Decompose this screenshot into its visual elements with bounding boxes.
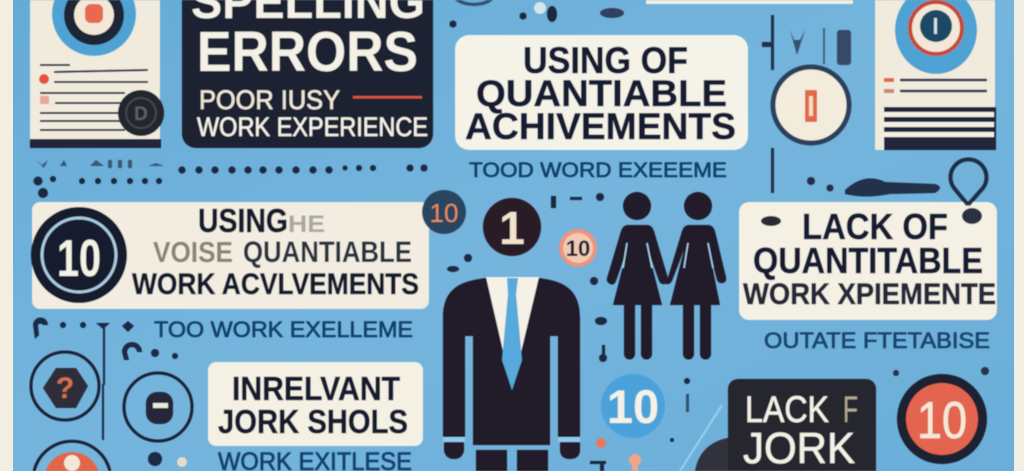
panel: top centre cream strip: [646, 0, 853, 4]
icon: red number 10 badge: 10: [917, 392, 967, 450]
text: tood word exeeeme: TOOD WORD EXEEEME: [469, 159, 727, 182]
streak and smudge: [680, 405, 732, 471]
heading: errors: ERRORS: [197, 20, 418, 84]
panel: lack of quantitable: QUANTITABLE: [753, 240, 983, 281]
icon: number 10 small badge: 10: [430, 198, 458, 228]
orange dots: [596, 438, 641, 471]
icon: target badge: [895, 0, 977, 74]
panel: spelling errors: [182, 0, 433, 148]
panel: using of quantiable achivements: ACHIVEMENTS: [465, 106, 736, 147]
icon: D badge: [118, 90, 164, 136]
panel: using quantitable work achievements: HE: [288, 211, 325, 238]
icon: man in suit: [443, 277, 580, 471]
icon: clock: [773, 67, 849, 143]
top centre marks: [450, 0, 624, 28]
panel: inrelvant jork shols: INRELVANT: [232, 370, 400, 407]
icon: question badge: [31, 352, 99, 420]
text: too work exelleme: TOO WORK EXELLEME: [154, 317, 413, 342]
panel: lack of quantitable: WORK XPIEMENTE: [743, 278, 996, 311]
icon: D badge: D: [134, 104, 148, 125]
panel: using quantitable work achievements: VOISE: [153, 237, 233, 269]
heading lines: USING OF: [523, 40, 688, 81]
icon: loop pin: [950, 159, 987, 224]
icon: orange 10 badge: 10: [566, 236, 590, 261]
text: poor iusy: POOR IUSY: [199, 85, 340, 115]
icon: orange 10 badge: [559, 229, 597, 267]
panel: inrelvant jork shols: JORK SHOLS: [218, 403, 408, 440]
panel: lack of quantitable: [739, 202, 997, 320]
icon: red number 10 badge: [897, 374, 987, 464]
panel: lack of jork: F: [843, 389, 858, 430]
panel: lack of jork: LACK: [745, 389, 829, 430]
panel: using quantitable work achievements: QUANTIABLE: [243, 236, 412, 269]
icon: blue number 10 badge: 10: [607, 380, 659, 433]
text: work experience: WORK EXPERIENCE: [197, 112, 428, 142]
icon: number 1 badge: 1: [499, 202, 525, 254]
icon: number 10 small badge: [422, 190, 466, 234]
panel: using quantitable work achievements: [31, 202, 429, 309]
dotted divider marks: [34, 160, 428, 198]
panel: lack of quantitable: LACK OF: [802, 206, 948, 247]
icon: number 1 badge: [483, 198, 541, 256]
icon: number 10 badge: [31, 207, 127, 303]
icon: red badge: [34, 441, 110, 471]
icon: two women holding hands: [607, 192, 726, 360]
panel: right resume document: [875, 0, 996, 150]
panel: lack of jork: [728, 379, 876, 471]
text: outate: OUTATE FTETABISE: [764, 328, 990, 353]
panel: left resume document: [30, 0, 164, 148]
marks near clock: [762, 15, 940, 196]
panel: inrelvant jork shols: [208, 362, 423, 446]
scattered marks: [447, 193, 690, 471]
icon: warning badge: [52, 0, 136, 56]
text lines: USING: [198, 202, 288, 239]
icon: lock badge: [124, 373, 192, 441]
panel: using of quantiable achivements: QUANTIABLE: [476, 73, 727, 114]
resume rows: [900, 80, 987, 91]
panel: using quantitable work achievements: WORK ACVLVEMENTS: [132, 268, 419, 301]
panel: using of quantiable achivements: [455, 35, 748, 150]
resume text lines: [40, 65, 148, 130]
icon: number 10 badge: 10: [57, 230, 101, 288]
icon: question badge: ?: [56, 372, 74, 405]
connector marks: [33, 318, 187, 467]
icon: blue number 10 badge: [601, 374, 665, 438]
